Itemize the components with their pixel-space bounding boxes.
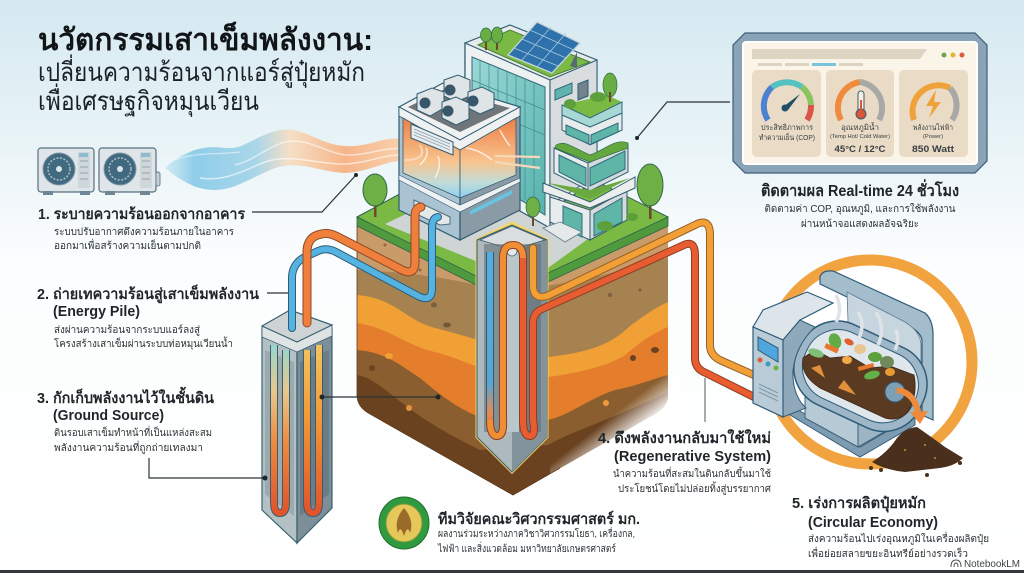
small energy pile [262, 310, 332, 543]
icon: solar panel [508, 22, 580, 73]
card: power: พลังงานไฟฟ้า [913, 123, 953, 132]
step 5 text: เพื่อย่อยสลายขยะอินทรีย์อย่างรวดเร็ว [808, 546, 968, 560]
leader: step 4 [704, 378, 706, 422]
leader: building to dashboard [635, 102, 730, 140]
step 1 text: ออกมาเพื่อสร้างความเย็นตามปกติ [54, 238, 201, 252]
step 5 text [792, 494, 989, 560]
research team text: ทีมวิจัยคณะวิศวกรรมศาสตร์ มก. [438, 510, 640, 528]
research team text [437, 510, 640, 555]
icon: outdoor AC unit 2 [99, 148, 160, 195]
card: water temperature: 45°C / 12°C [834, 144, 886, 155]
grass surface [357, 183, 668, 296]
card: COP: ทำความเย็น (COP) [759, 132, 815, 142]
drum housing [781, 308, 940, 445]
step 4 text [598, 429, 772, 495]
monitoring text [761, 179, 959, 230]
dashboard frame [733, 33, 987, 173]
tower [465, 25, 597, 228]
monitoring text: ติดตามผล Real-time 24 ชั่วโมง [761, 179, 959, 200]
card: water temperature [826, 70, 894, 157]
card: COP [752, 70, 821, 157]
leader: step 1 [252, 173, 358, 212]
compost body [803, 350, 915, 419]
step 5 text: ส่งความร้อนไปเร่งอุณหภูมิในเครื่องผลิตปุ๋ย [808, 531, 989, 545]
monitoring text: ติดตามค่า COP, อุณหภูมิ, และการใช้พลังงาน [764, 203, 956, 215]
step 2 text: โครงสร้างเสาเข็มผ่านระบบท่อหมุนเวียนน้ำ [54, 336, 233, 350]
composter [753, 260, 972, 477]
step 1 text: 1. ระบายความร้อนออกจากอาคาร [38, 206, 246, 223]
icon: university logo [379, 497, 429, 549]
step 5 text: 5. เร่งการผลิตปุ๋ยหมัก [792, 494, 926, 513]
step 2 text: 2. ถ่ายเทความร้อนสู่เสาเข็มพลังงาน [37, 284, 260, 304]
step 3 text: 3. กักเก็บพลังงานไว้ในชั้นดิน [37, 386, 215, 407]
title [38, 21, 373, 117]
step 1 text: ระบบปรับอากาศดึงความร้อนภายในอาคาร [54, 226, 235, 238]
monitoring text: ผ่านหน้าจอแสดงผลอัจฉริยะ [801, 218, 919, 230]
step 5 text: (Circular Economy) [808, 514, 938, 531]
icon: indoor air conditioner [411, 124, 453, 155]
leader: step 3 [149, 458, 268, 480]
pipes: building to small energy pile [292, 207, 438, 328]
icon: rooftop AC units [417, 75, 494, 125]
ground fade [550, 362, 680, 500]
paving [385, 205, 625, 268]
machine stand [790, 405, 915, 457]
card: power [899, 70, 968, 157]
step 4 text: 4. ดึงพลังงานกลับมาใช้ใหม่ [598, 429, 771, 447]
orange ring [768, 260, 972, 464]
leader: pile to soil [320, 394, 440, 400]
step 3 text: ดินรอบเสาเข็มทำหน้าที่เป็นแหล่งสะสม [54, 425, 212, 439]
pipe connection box [414, 200, 450, 225]
step 4 text: นำความร้อนที่สะสมในดินกลับขึ้นมาใช้ [613, 466, 771, 480]
card: power: (Power) [923, 134, 943, 140]
title: เปลี่ยนความร้อนจากแอร์สู่ปุ๋ยหมัก [38, 54, 365, 88]
outlet arrow [885, 382, 905, 402]
step 4 text: (Regenerative System) [614, 448, 771, 465]
stepped terraces [543, 73, 635, 242]
dashboard [733, 33, 987, 173]
watermark: NotebookLM [964, 558, 1020, 570]
building [363, 22, 663, 242]
roof trees [480, 27, 502, 50]
card: water temperature: อุณหภูมิน้ำ [841, 122, 879, 132]
outline left [357, 226, 560, 495]
step 1 text [38, 206, 246, 252]
compost pile [872, 427, 963, 472]
step 2 text: ส่งผ่านความร้อนจากระบบแอร์ลงสู่ [54, 324, 200, 336]
research team text: ไฟฟ้า และสิ่งแวดล้อม มหาวิทยาลัยเกษตรศาสตร์ [437, 541, 617, 555]
door [820, 271, 933, 420]
title: เพื่อเศรษฐกิจหมุนเวียน [38, 83, 259, 117]
step 3 text: (Ground Source) [53, 407, 164, 424]
step 3 text [37, 386, 215, 454]
title bar [752, 49, 927, 59]
food scraps [807, 331, 895, 381]
lower block with cut-away room [399, 83, 540, 240]
step 2 text: (Energy Pile) [53, 303, 140, 320]
trees [363, 164, 663, 231]
control box [753, 292, 833, 340]
card: water temperature: (Temp Hot/ Cold Water) [830, 134, 890, 140]
steam [836, 295, 898, 350]
heat wave airflow [165, 130, 410, 190]
icon: outdoor AC unit 1 [38, 148, 94, 195]
pipes: central pile to composter [533, 223, 756, 376]
card: power: 850 Watt [912, 144, 955, 155]
card: COP: ประสิทธิภาพการ [761, 123, 813, 132]
right U pipe [307, 345, 319, 513]
left U pipe [274, 345, 286, 513]
central energy pile [477, 223, 756, 472]
title: นวัตกรรมเสาเข็มพลังงาน: [38, 21, 373, 57]
grass edge [357, 217, 478, 286]
research team text: ผลงานร่วมระหว่างภาควิชาวิศวกรรมโยธา, เครื่องกล, [438, 526, 635, 540]
step 4 text: ประโยชน์โดยไม่ปล่อยทิ้งสู่บรรยากาศ [618, 481, 772, 495]
leader: step 2 [267, 292, 288, 294]
step 2 text [37, 284, 260, 350]
step 3 text: พลังงานความร้อนที่ถูกถ่ายเทลงมา [54, 440, 203, 454]
soil layers [357, 226, 668, 494]
ground cross-section [350, 183, 680, 500]
